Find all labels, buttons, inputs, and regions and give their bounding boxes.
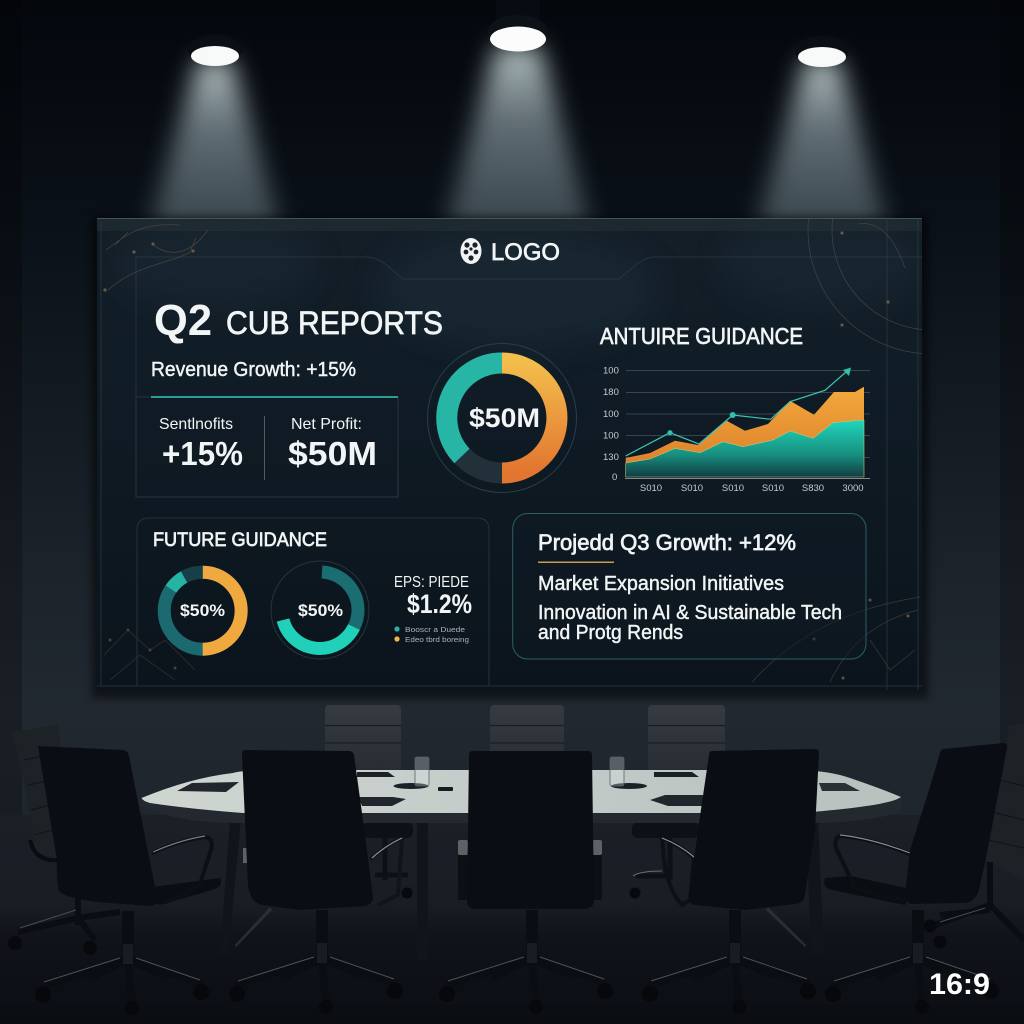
tablet far right: [819, 783, 860, 791]
y axis labels: [603, 366, 619, 483]
arm left: [458, 840, 468, 900]
orange area: [626, 387, 864, 468]
left wall pillar: [0, 0, 22, 815]
donut: left: $50%: [180, 601, 225, 620]
x axis labels: 3000: [842, 483, 864, 494]
logo: [460, 238, 560, 266]
title: CUB REPORTS: [226, 305, 443, 341]
armrest: [662, 838, 694, 905]
donut value: $50M: [469, 403, 540, 433]
EPS stat: $1.2%: [407, 589, 472, 619]
circuit decoration bottom left: [104, 629, 195, 680]
metric: net profit: $50M: [288, 435, 377, 472]
tablet right back: [654, 772, 699, 777]
orange segment: [502, 363, 557, 473]
x axis labels: [640, 484, 864, 491]
backrest: [38, 746, 158, 906]
EPS stat: [395, 576, 472, 615]
aspect ratio label: 16:9: [929, 968, 990, 1001]
chair: front center right: [642, 749, 819, 1014]
y axis labels: 180: [603, 387, 619, 398]
x axis labels: S010: [722, 483, 744, 494]
chair: front center: [439, 751, 613, 1014]
legend: Booscr a Duede: [405, 625, 465, 634]
screen frame lines: [97, 218, 922, 690]
trend line: [626, 372, 846, 456]
circuit decoration bottom right: [752, 597, 920, 682]
glass right: [610, 757, 647, 789]
metric: sentiment: +15%: [162, 435, 243, 472]
side chair left: [8, 725, 120, 955]
x axis labels: S010: [762, 483, 784, 494]
back row chairs: [325, 705, 725, 898]
screen shadow: [92, 216, 928, 698]
lamp: right: [795, 36, 849, 67]
donut: right: $50%: [298, 601, 343, 620]
logo icon: [460, 238, 482, 264]
lamp: left: [188, 35, 242, 66]
y axis labels: 130: [603, 452, 619, 463]
title: Q2: [154, 296, 212, 345]
donut: right: [271, 561, 369, 659]
innovation text: and Protg Rends: [538, 622, 683, 644]
tablet center front: [358, 797, 406, 806]
tablet center back: [357, 772, 395, 777]
panel: key metrics: [136, 396, 398, 497]
x axis labels: S010: [640, 483, 662, 494]
teal segment: [447, 363, 502, 456]
chair: front far right: [824, 743, 1007, 1014]
circuit decoration top left: [104, 225, 208, 292]
initiative text: Market Expansion Initiatives: [538, 573, 784, 595]
table edge: [141, 798, 901, 823]
heading: FUTURE GUIDANCE: [153, 530, 327, 551]
y axis labels: 100: [603, 409, 619, 420]
lamp: center: [488, 0, 548, 52]
chair: front center left: [229, 750, 403, 1014]
seat under table right: [630, 822, 699, 898]
legend: [394, 625, 469, 644]
metric: net profit: [288, 418, 375, 468]
title: [156, 304, 442, 344]
growth heading: Projedd Q3 Growth: +12%: [538, 530, 796, 555]
chair: front far left: [35, 746, 221, 1015]
tablet right front: [650, 795, 705, 806]
logo: LOGO: [491, 239, 560, 266]
armrest: [152, 837, 212, 902]
main donut chart: [428, 344, 576, 492]
chart heading: ANTUIRE GUIDANCE: [600, 323, 803, 349]
backrest: [467, 751, 594, 909]
display screen: [97, 218, 922, 690]
panel: future guidance: [137, 518, 489, 686]
revenue growth headline: Revenue Growth: +15%: [151, 359, 356, 381]
floor: [0, 815, 1024, 1024]
conference table: [141, 757, 901, 960]
circuit decoration top right: [808, 218, 922, 354]
beam: left: [148, 60, 282, 235]
seat: [130, 878, 221, 905]
innovation text: Innovation in AI & Sustainable Tech: [538, 602, 842, 624]
backrest: [905, 743, 1007, 904]
innovation text: [538, 602, 842, 644]
side chair right: [924, 724, 1024, 948]
metric: sentiment: [160, 418, 242, 466]
y axis labels: 100: [603, 430, 619, 442]
arm left: [243, 848, 249, 863]
back chair 1: [325, 705, 401, 775]
right wall pillar: [1000, 0, 1024, 815]
backrest: [242, 750, 373, 910]
back chair 3: [648, 705, 725, 775]
beam: center: [444, 46, 592, 235]
armrest: [836, 836, 910, 900]
y axis labels: 100: [603, 366, 619, 376]
glass left: [394, 757, 429, 789]
seat: [824, 876, 915, 905]
legend: Edeo tbrd boreing: [405, 635, 469, 644]
metric: net profit: Net Profit:: [291, 416, 362, 433]
donut: left: [164, 572, 241, 649]
panel: projected growth: [513, 514, 866, 659]
seat under table left: [363, 822, 413, 898]
y axis labels: 0: [612, 472, 617, 483]
armrest: [370, 838, 402, 905]
backrest: [689, 749, 819, 910]
x axis labels: S010: [681, 483, 703, 494]
back chair 2: [490, 705, 564, 775]
x axis labels: S830: [802, 483, 824, 494]
phone: [438, 787, 453, 791]
area chart: [603, 366, 870, 494]
table legs: [220, 820, 824, 960]
arm right: [592, 840, 602, 900]
table top: [142, 770, 901, 813]
spotlights: [148, 0, 889, 235]
beam: right: [755, 60, 889, 235]
metric: sentiment: Sentlnofits: [159, 416, 233, 433]
teal area: [626, 420, 864, 477]
trend markers: [667, 368, 851, 435]
EPS stat: EPS: PIEDE: [394, 574, 469, 591]
tablet left: [177, 782, 239, 792]
